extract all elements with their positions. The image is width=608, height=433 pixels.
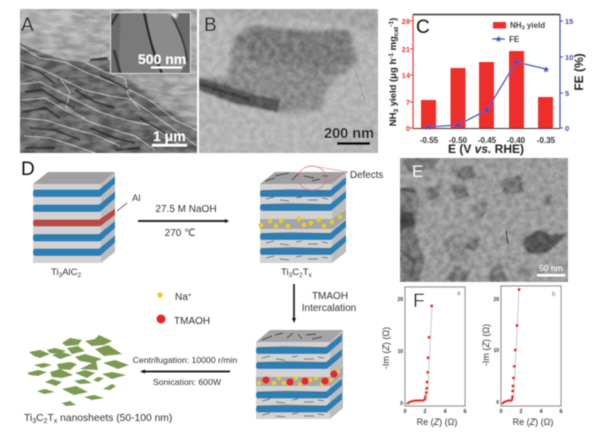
Ti3C2Tx stack with Na+ — [259, 172, 346, 263]
panel A letter: A — [21, 15, 34, 36]
legend — [492, 21, 545, 44]
plot b: -Im (Z) (Ω) — [481, 324, 491, 366]
label: nanosheets: Ti — [24, 413, 32, 424]
label: Ti3C2Tx: C — [292, 267, 299, 278]
label: nanosheets: nanosheets (50-100 nm) — [57, 413, 172, 424]
left axis title: 3 — [393, 109, 400, 113]
legend: TMAOH — [156, 314, 210, 327]
callout: Defects: Defects — [350, 170, 383, 181]
label: nanosheets: T — [47, 413, 54, 424]
plot b: b — [552, 292, 556, 298]
plot a: Re (Z) (Ω) — [417, 417, 457, 427]
left axis title: yield (μg h — [388, 59, 399, 109]
panel D: synthesis schematic — [21, 159, 383, 425]
legend: Na+: + — [188, 292, 192, 299]
right axis ticks: 15 — [565, 17, 573, 26]
arrow: TMAOH intercalation: Intercalation — [302, 303, 356, 314]
right axis ticks: 10 — [565, 53, 573, 62]
line: FE: ★ — [512, 57, 520, 67]
arrow: exfoliation: Centrifugation: 10000 r/min — [133, 355, 238, 365]
arrow: TMAOH intercalation: TMAOH — [312, 291, 348, 302]
arrow: NaOH etch: 27.5 M NaOH — [155, 204, 217, 215]
scale bar: 1 um: 1 μm — [153, 128, 186, 144]
right axis ticks — [565, 17, 573, 133]
plot a: 20 — [397, 297, 403, 303]
panel B letter: B — [204, 15, 217, 36]
label: nanosheets: x — [54, 418, 58, 425]
line: FE: ★ — [454, 120, 462, 130]
letter F: F — [413, 291, 425, 312]
line: FE: ★ — [542, 64, 550, 74]
arrow: TMAOH intercalation — [292, 284, 356, 323]
label: Ti3C2Tx: 2 — [299, 272, 303, 279]
left axis ticks: 28 — [402, 17, 410, 26]
bars: NH3 yield — [421, 51, 553, 128]
label: Ti3C2Tx: 3 — [289, 272, 293, 279]
label: Ti3C2Tx: x — [308, 272, 312, 279]
right axis ticks: 0 — [565, 124, 569, 133]
legend: ★ — [494, 34, 503, 44]
arrow: exfoliation: Sonication: 600W — [153, 377, 222, 387]
plot b: Re (Z) (Ω) — [513, 417, 553, 427]
scale bar: 50 nm — [537, 263, 565, 276]
legend: 3 — [522, 26, 525, 32]
plot a: 10 — [397, 349, 403, 355]
plot b: 20 — [493, 297, 499, 303]
scale bar: 200 nm: 200 nm — [324, 126, 374, 142]
Ti3AlC2 stack — [33, 172, 115, 263]
arrow: NaOH etch — [138, 204, 229, 239]
smooth upper surface — [20, 9, 197, 127]
left axis title: ) — [388, 18, 399, 21]
scale bar: 50 nm: 50 nm — [539, 263, 563, 273]
legend: yield — [525, 21, 545, 30]
label: Ti3C2Tx: Ti — [281, 267, 289, 278]
panel B: TEM image — [199, 9, 378, 153]
Ti3C2Tx nanosheets — [27, 335, 129, 406]
plot a: 0 — [400, 401, 403, 407]
x axis ticks: -0.50 — [449, 136, 468, 145]
chart frame — [412, 14, 414, 128]
layered ridges — [20, 46, 197, 153]
intercalated stack with TMAOH — [256, 330, 343, 419]
label: Ti3AlC2: AlC — [62, 267, 78, 278]
plot a: 6 — [463, 409, 467, 415]
label: Al with pointer: Al — [132, 193, 140, 204]
plot a — [381, 287, 467, 427]
left axis ticks: 0 — [406, 124, 410, 133]
legend: FE — [509, 35, 520, 44]
right axis title: FE (%) — [572, 53, 586, 91]
left axis title: mg — [388, 36, 399, 53]
label: Ti3AlC2: 2 — [78, 272, 82, 279]
x axis ticks — [420, 136, 556, 145]
x axis ticks: -0.35 — [537, 136, 556, 145]
legend: Na+ — [157, 292, 192, 303]
label: nanosheets: 2 — [44, 418, 48, 425]
panel E: TEM image — [400, 158, 568, 282]
panel F: impedance plots — [381, 286, 563, 427]
panel D letter: D — [21, 159, 35, 180]
legend: TMAOH: TMAOH — [174, 316, 210, 327]
right axis ticks: 5 — [565, 89, 569, 98]
x axis title: E (V vs. RHE) — [448, 142, 524, 156]
TMAOH ions — [262, 370, 338, 386]
label: nanosheets: 3 — [32, 418, 36, 425]
plot a: 4 — [443, 409, 447, 415]
label: Ti3AlC2: Ti — [51, 267, 59, 278]
line: FE: ★ — [483, 105, 491, 115]
left axis ticks: 14 — [402, 71, 411, 80]
plot b — [481, 286, 563, 427]
left axis title: -1 — [388, 21, 395, 27]
label: nanosheets: C — [36, 413, 44, 424]
plot a: 2 — [423, 409, 427, 415]
left axis ticks: 7 — [406, 98, 410, 107]
left axis title: cat — [393, 26, 400, 36]
plot a: a — [457, 291, 461, 297]
plot b: 0 — [496, 400, 499, 406]
x axis ticks: -0.45 — [478, 136, 497, 145]
label: Ti3AlC2: 3 — [59, 272, 63, 279]
line: FE: ★ — [424, 122, 432, 132]
label: Al with pointer — [117, 193, 140, 211]
Na+ ions — [257, 370, 340, 386]
left axis ticks — [402, 17, 411, 133]
plot b: 0 — [499, 409, 503, 415]
left axis ticks: 21 — [402, 45, 410, 54]
scale bar: 500 nm: 500 nm — [138, 51, 186, 67]
plot a: 0 — [403, 409, 407, 415]
x axis ticks: -0.55 — [420, 136, 439, 145]
panel C: bar and line chart — [388, 14, 586, 156]
plot b: 6 — [559, 409, 563, 415]
arrow: exfoliation — [133, 355, 238, 387]
arrow: NaOH etch: 270 ℃ — [165, 228, 195, 239]
legend: Na+: Na — [175, 292, 188, 303]
callout: Defects — [298, 166, 383, 190]
plot a: -Im (Z) (Ω) — [381, 327, 391, 369]
x axis ticks: -0.40 — [507, 136, 526, 145]
plot b: 2 — [519, 409, 523, 415]
panel A: SEM image — [20, 9, 197, 153]
line: FE — [424, 57, 550, 132]
plot b: 4 — [539, 409, 543, 415]
left axis title: NH — [388, 113, 399, 126]
left axis title: -1 — [388, 53, 395, 59]
label: Ti3C2Tx: T — [303, 267, 309, 278]
panel C letter: C — [416, 17, 430, 38]
panel E letter: E — [412, 162, 423, 181]
inset: higher magnification SEM — [110, 12, 191, 74]
plot b: 10 — [493, 348, 499, 354]
Na+ ions — [259, 215, 342, 228]
legend: NH — [510, 21, 522, 30]
